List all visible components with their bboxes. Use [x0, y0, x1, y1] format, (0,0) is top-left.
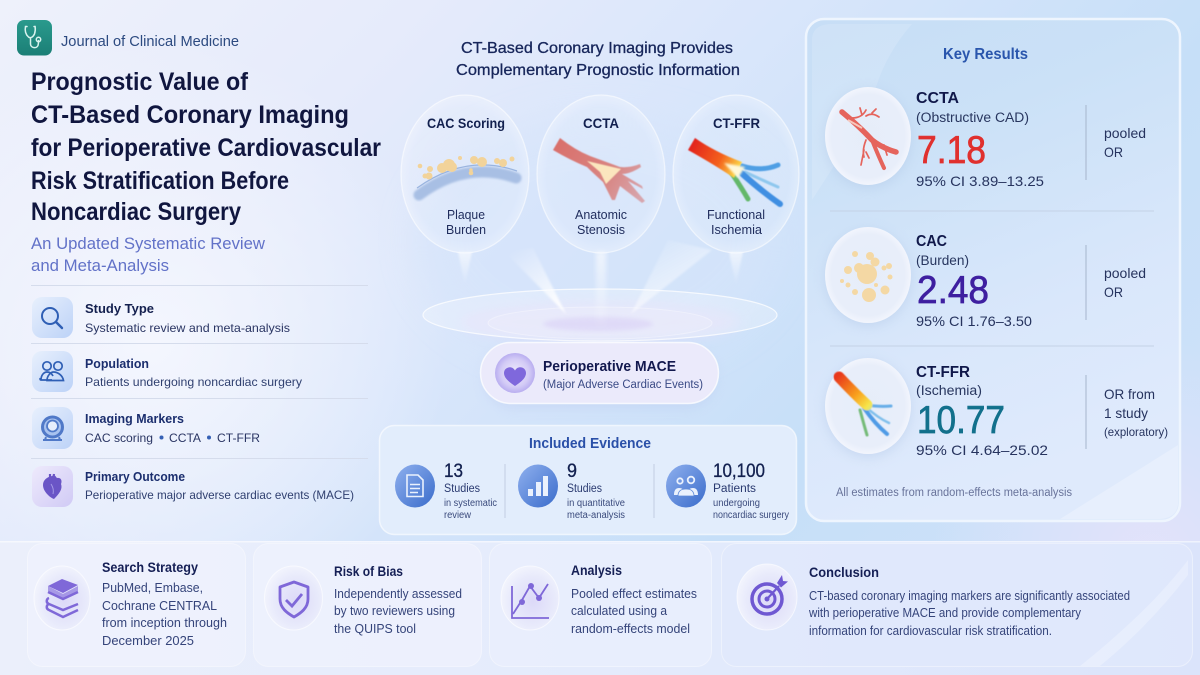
bubble: CAC scoring: CAC Scoring [427, 115, 505, 131]
main title [31, 68, 381, 226]
subtitle: An Updated Systematic Review [31, 235, 265, 253]
journal name: Journal of Clinical Medicine [61, 34, 239, 50]
icon: line chart [501, 566, 559, 630]
card: analysis: Pooled effect estimates [571, 587, 697, 601]
stat: 10,100 patients [666, 461, 789, 521]
imaging markers row: Imaging Markers [85, 411, 184, 426]
bubble: CT-FFR: CT-FFR [713, 115, 760, 131]
imaging markers row: CCTA [169, 431, 201, 445]
icon: calcified vessel [417, 156, 517, 195]
card: risk of bias: Risk of Bias [334, 564, 403, 579]
primary outcome row: Perioperative major adverse cardiac events (MACE) [85, 488, 354, 502]
bubble: CT-FFR [673, 95, 799, 253]
card: search strategy: PubMed, Embase, [102, 581, 203, 595]
footnote: All estimates from random-effects meta-analysis [836, 487, 1072, 499]
included evidence panel: Included Evidence [529, 436, 651, 452]
subtitle [31, 235, 265, 275]
card: search strategy: Cochrane CENTRAL [102, 599, 217, 613]
center heading [456, 40, 740, 79]
card: search strategy [28, 544, 246, 666]
stat: 10,100 patients: noncardiac surgery [713, 510, 789, 521]
result: CCTA: OR [1104, 144, 1123, 160]
included evidence panel [380, 426, 796, 534]
main title: Prognostic Value of [31, 68, 249, 96]
stat: 9 studies: in quantitative [567, 498, 625, 509]
bubble: CCTA: Anatomic [575, 208, 627, 222]
center heading: Complementary Prognostic Information [456, 62, 740, 79]
result: CCTA: pooled [1104, 125, 1146, 141]
center heading: CT-Based Coronary Imaging Provides [461, 40, 733, 57]
result: CCTA: 7.18 [917, 129, 986, 172]
card: analysis: Analysis [571, 563, 622, 578]
bubble: CCTA [537, 95, 665, 253]
stat: 13 studies: review [444, 510, 472, 521]
main title: Risk Stratification Before [31, 167, 289, 195]
stat: 13 studies: 13 [444, 461, 463, 482]
MACE outcome pill: (Major Adverse Cardiac Events) [543, 379, 703, 391]
bubble: CCTA: CCTA [583, 115, 619, 131]
study type row [32, 297, 290, 338]
result: CT-FFR: 1 study [1104, 405, 1148, 421]
card: analysis: calculated using a [571, 604, 667, 618]
card: risk of bias [254, 544, 482, 666]
light beams and platform [423, 240, 777, 342]
result: CT-FFR: 10.77 [917, 399, 1005, 442]
primary outcome row [32, 466, 354, 507]
result: CAC [825, 227, 1146, 329]
stat: 13 studies: in systematic [444, 498, 497, 509]
result: CCTA [825, 87, 1146, 189]
bubble: CAC scoring: Plaque [447, 208, 485, 222]
imaging markers row: CAC scoring [85, 431, 153, 445]
stat: 10,100 patients: Patients [713, 483, 756, 495]
result: CCTA: (Obstructive CAD) [916, 110, 1029, 125]
icon: artery with stenosis [553, 138, 645, 203]
population row [32, 351, 302, 392]
card: analysis [490, 544, 712, 666]
key results panel: Key Results [943, 46, 1028, 63]
card: risk of bias: the QUIPS tool [334, 622, 416, 636]
result: CAC: OR [1104, 284, 1123, 300]
result: CCTA: CCTA [916, 90, 959, 107]
bubble: CT-FFR: Functional [707, 208, 765, 222]
imaging markers row [32, 407, 260, 449]
icon: heart [495, 353, 535, 393]
stat: 9 studies: 9 [567, 461, 577, 482]
stat: 10,100 patients: 10,100 [713, 461, 765, 482]
card: search strategy: from inception through [102, 616, 227, 630]
card: conclusion: with perioperative MACE and provide complementary [808, 606, 1082, 620]
main title: for Perioperative Cardiovascular [31, 134, 381, 162]
stat: 9 studies: meta-analysis [567, 510, 625, 521]
key results panel [806, 19, 1180, 521]
result: CT-FFR: (exploratory) [1104, 425, 1168, 439]
result: CAC: CAC [916, 233, 947, 250]
stat: 13 studies [395, 461, 497, 521]
card: search strategy: Search Strategy [102, 560, 198, 575]
stat: 10,100 patients: undergoing [713, 498, 760, 509]
icon: shield [264, 566, 322, 630]
bubble: CAC scoring [401, 95, 529, 253]
journal logo [17, 20, 52, 56]
result: CT-FFR: OR from [1104, 386, 1155, 402]
stat: 9 studies: Studies [567, 483, 602, 495]
card: search strategy: December 2025 [102, 634, 194, 648]
card: conclusion: Conclusion [809, 565, 879, 580]
result: CAC: 2.48 [917, 269, 989, 312]
stat: 9 studies [518, 461, 625, 521]
card: risk of bias: Independently assessed [334, 587, 462, 601]
result: CT-FFR: (Ischemia) [916, 383, 982, 398]
MACE outcome pill [480, 342, 718, 408]
main title: CT-Based Coronary Imaging [31, 101, 349, 129]
bubble: CCTA: Stenosis [577, 223, 625, 237]
stat: 13 studies: Studies [444, 483, 480, 495]
result: CCTA: 95% CI 3.89–13.25 [916, 173, 1044, 189]
icon: target [737, 564, 797, 630]
study type row: Systematic review and meta-analysis [85, 321, 290, 335]
result: CT-FFR: 95% CI 4.64–25.02 [916, 442, 1048, 458]
main title: Noncardiac Surgery [31, 198, 241, 226]
card: conclusion: information for cardiovascular risk stratification. [809, 624, 1052, 638]
result: CT-FFR [825, 358, 1168, 458]
bubble: CT-FFR: Ischemia [711, 223, 762, 237]
MACE outcome pill: Perioperative MACE [543, 358, 676, 375]
imaging markers row: CT-FFR [217, 431, 260, 445]
card: conclusion: CT-based coronary imaging markers are significantly associated [809, 589, 1130, 603]
card: risk of bias: by two reviewers using [334, 604, 455, 618]
result: CAC: (Burden) [916, 253, 969, 268]
result: CAC: 95% CI 1.76–3.50 [916, 313, 1032, 329]
bubble: CAC scoring: Burden [446, 223, 486, 237]
soft glow behind center [420, 120, 780, 360]
icon: books [34, 566, 90, 630]
study details list [31, 286, 368, 507]
result: CAC: pooled [1104, 265, 1146, 281]
primary outcome row: Primary Outcome [85, 469, 185, 484]
subtitle: and Meta-Analysis [31, 257, 169, 275]
study type row: Study Type [85, 301, 154, 316]
icon: FFR colour map [688, 138, 780, 204]
card: analysis: random-effects model [571, 622, 690, 636]
population row: Patients undergoing noncardiac surgery [85, 375, 302, 389]
population row: Population [85, 356, 149, 371]
result: CT-FFR: CT-FFR [916, 364, 970, 381]
card: conclusion [722, 544, 1192, 666]
